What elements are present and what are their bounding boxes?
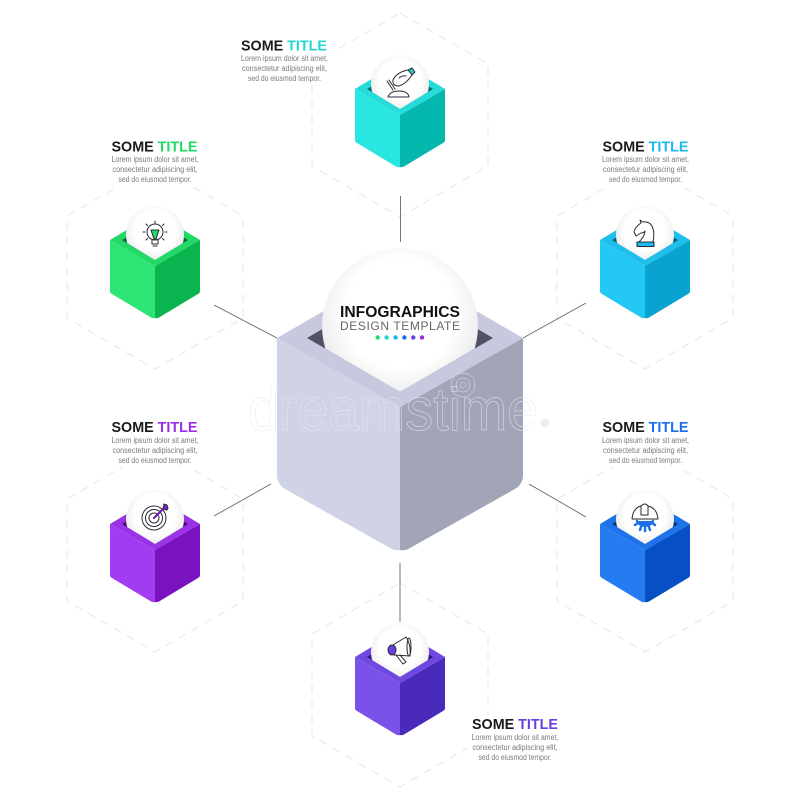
text block: top xyxy=(236,36,333,85)
body: Lorem ipsum dolor sit amet, xyxy=(241,54,328,63)
cube: upper right sky blue xyxy=(600,206,690,318)
title: SOME TITLE xyxy=(112,138,198,156)
title: SOME TITLE xyxy=(472,716,558,733)
cube: upper left green xyxy=(110,206,200,318)
right face xyxy=(155,240,200,318)
body: Lorem ipsum dolor sit amet, xyxy=(472,733,558,742)
heading line 1: INFOGRAPHICS xyxy=(340,304,460,321)
cube: bottom indigo xyxy=(355,623,445,735)
watermark: dreamstime xyxy=(248,376,538,443)
opening xyxy=(122,220,188,260)
body: consectetur adipiscing elit, xyxy=(112,165,198,174)
title: SOME TITLE xyxy=(602,419,688,436)
left face xyxy=(600,524,645,602)
title: SOME TITLE xyxy=(241,38,327,54)
left face xyxy=(355,89,400,167)
ball xyxy=(126,212,184,260)
text block: upper left xyxy=(106,137,203,186)
rim xyxy=(600,213,690,266)
body: Lorem ipsum dolor sit amet, xyxy=(602,155,689,164)
left face xyxy=(600,240,645,318)
right face xyxy=(645,240,690,318)
ball xyxy=(616,496,674,544)
body: consectetur adipiscing elit, xyxy=(112,446,198,455)
central cube right face xyxy=(400,338,523,550)
central cube opening xyxy=(307,284,493,392)
icon: target with dart xyxy=(142,504,168,530)
dashed hexagon: lower right xyxy=(557,448,733,652)
right face xyxy=(400,89,445,167)
left face xyxy=(110,240,155,318)
ball xyxy=(371,629,429,677)
opening xyxy=(122,504,188,544)
body: sed do eiusmod tempor. xyxy=(609,175,682,184)
colour dots xyxy=(376,335,424,340)
connector: upper left xyxy=(214,305,277,338)
opening xyxy=(367,637,433,677)
opening xyxy=(612,220,678,260)
body: Lorem ipsum dolor sit amet, xyxy=(602,436,689,445)
dashed hexagon: upper left xyxy=(67,165,243,369)
heading line 2: DESIGN TEMPLATE xyxy=(340,319,460,333)
text block: upper right xyxy=(597,137,694,186)
connector: bottom xyxy=(399,563,401,622)
connector: lower left xyxy=(214,484,271,516)
body: sed do eiusmod tempor. xyxy=(118,175,192,184)
text block: lower right xyxy=(597,418,694,467)
icon: microscope xyxy=(387,68,415,97)
right face xyxy=(400,657,445,735)
left face xyxy=(355,657,400,735)
dashed hexagon: bottom xyxy=(312,583,488,787)
icon: chess knight xyxy=(634,220,654,246)
central cube left face xyxy=(277,338,400,550)
body: Lorem ipsum dolor sit amet, xyxy=(112,155,198,164)
opening xyxy=(612,504,678,544)
icon: helmet and gear xyxy=(632,504,658,531)
body: Lorem ipsum dolor sit amet, xyxy=(112,436,198,445)
icon: light bulb xyxy=(143,221,167,246)
body: sed do eiusmod tempor. xyxy=(478,753,552,762)
connector: lower right xyxy=(529,484,586,517)
title: SOME TITLE xyxy=(112,419,198,436)
central white ball xyxy=(322,258,478,392)
left face xyxy=(110,524,155,602)
title: SOME TITLE xyxy=(602,138,688,156)
ball xyxy=(126,496,184,544)
body: sed do eiusmod tempor. xyxy=(609,456,682,465)
opening xyxy=(367,69,433,109)
rim xyxy=(355,62,445,115)
right face xyxy=(645,524,690,602)
cube: lower left purple xyxy=(110,490,200,602)
rim xyxy=(110,213,200,266)
ball xyxy=(616,212,674,260)
right face xyxy=(155,524,200,602)
dashed hexagon: lower left xyxy=(67,448,243,652)
dashed hexagon: top xyxy=(312,13,488,217)
ball xyxy=(371,61,429,109)
central heading xyxy=(340,304,460,333)
rim xyxy=(355,630,445,683)
cube: lower right blue xyxy=(600,490,690,602)
body: consectetur adipiscing elit, xyxy=(603,165,688,174)
rim xyxy=(110,497,200,550)
dashed hexagon: upper right xyxy=(557,165,733,369)
text block: bottom xyxy=(467,715,564,764)
icon: megaphone xyxy=(388,637,411,664)
cube: top teal xyxy=(355,55,445,167)
central cube rim xyxy=(277,267,523,407)
connector: upper right xyxy=(523,303,586,338)
connector: top xyxy=(400,196,402,242)
text block: lower left xyxy=(106,418,203,467)
body: consectetur adipiscing elit, xyxy=(472,743,558,752)
body: sed do eiusmod tempor. xyxy=(248,74,321,83)
rim xyxy=(600,497,690,550)
body: consectetur adipiscing elit, xyxy=(603,446,688,455)
body: consectetur adipiscing elit, xyxy=(242,64,327,73)
body: sed do eiusmod tempor. xyxy=(118,456,192,465)
central cube xyxy=(277,248,523,550)
